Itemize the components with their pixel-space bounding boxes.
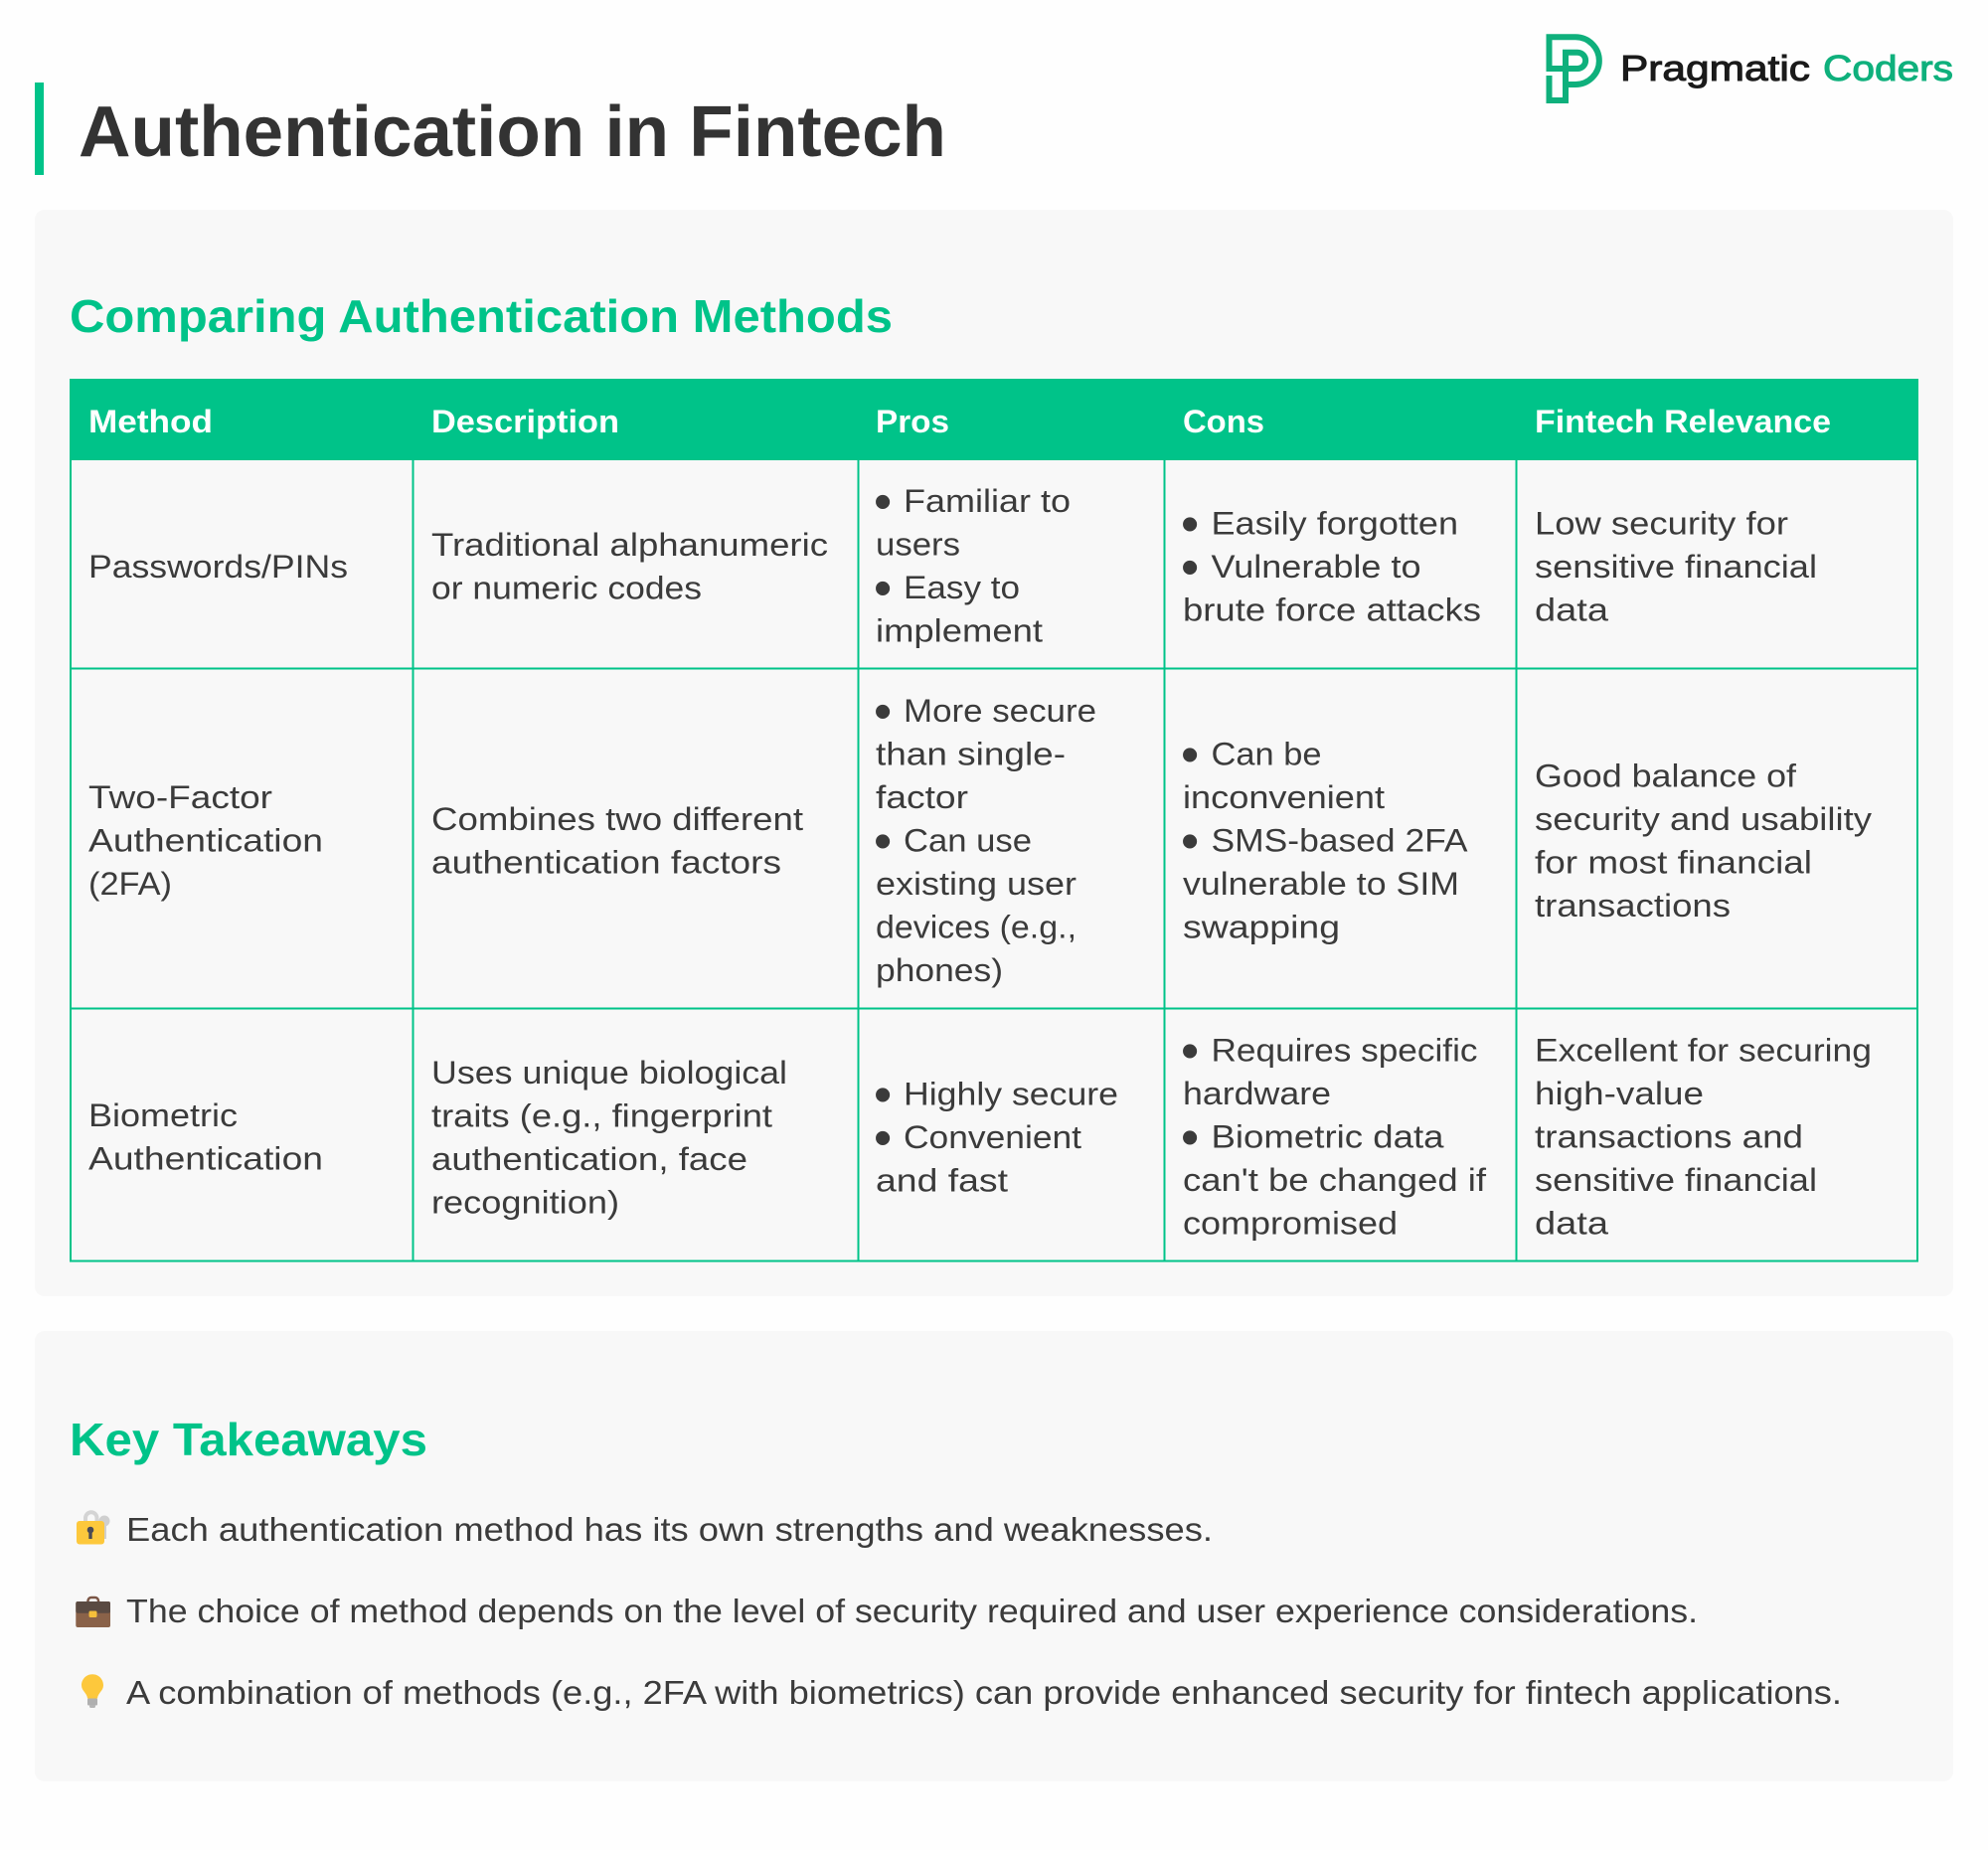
icon: logo mark <box>1549 37 1599 100</box>
takeaway text: Each authentication method has its own strengths and weaknesses. <box>126 1511 1213 1548</box>
cell: fintech relevance: high-value <box>1535 1076 1704 1111</box>
cell: description <box>431 1055 787 1221</box>
icon: briefcase <box>76 1598 110 1627</box>
cell: cons: hardware <box>1183 1076 1331 1111</box>
cell: fintech relevance <box>1535 757 1872 924</box>
cell: pros: factor <box>876 779 968 815</box>
cell: pros: Can use <box>904 823 1032 859</box>
cell: pros: • <box>874 473 892 531</box>
cell: cons: • <box>1181 1109 1199 1167</box>
cell: pros <box>874 473 1071 648</box>
cell: pros: existing user <box>876 866 1077 902</box>
cell: cons: can't be changed if <box>1183 1162 1486 1198</box>
cell: description <box>431 527 828 606</box>
cell: pros: phones) <box>876 952 1003 988</box>
cell: cons <box>1181 726 1468 944</box>
header: Cons: Cons <box>1183 404 1264 439</box>
cell: description: Uses unique biological <box>431 1055 787 1091</box>
cell: pros: implement <box>876 612 1043 648</box>
cell: cons: • <box>1181 1022 1199 1080</box>
cell: method: (2FA) <box>88 866 172 902</box>
cell: cons <box>1181 495 1481 628</box>
icon: lock with key <box>77 1512 109 1545</box>
cell: description: or numeric codes <box>431 571 702 606</box>
cell: description <box>431 801 803 881</box>
cell: pros: • <box>874 560 892 617</box>
header: Method: Method <box>88 404 213 439</box>
heading: comparing authentication methods: Comparing Authentication Methods <box>70 290 893 342</box>
icon: light bulb <box>82 1674 103 1708</box>
header: Pros: Pros <box>876 404 949 439</box>
cell: cons: SMS-based 2FA <box>1211 823 1468 859</box>
cell: pros: than single- <box>876 736 1066 771</box>
takeaway 3 <box>82 1674 1842 1711</box>
cell: cons: inconvenient <box>1183 779 1385 815</box>
cell: method: Passwords/PINs <box>88 549 348 585</box>
table header row <box>70 379 1918 460</box>
cell: fintech relevance: for most financial <box>1535 845 1812 881</box>
cell: fintech relevance <box>1535 1032 1872 1241</box>
cell: fintech relevance: security and usability <box>1535 801 1872 837</box>
cell: cons: Biometric data <box>1211 1119 1444 1155</box>
takeaway text: A combination of methods (e.g., 2FA with biometrics) can provide enhanced security for fintech applications. <box>126 1674 1842 1711</box>
cell: fintech relevance: data <box>1535 592 1608 628</box>
cell: cons: Easily forgotten <box>1211 505 1458 541</box>
cell: fintech relevance: transactions <box>1535 888 1731 924</box>
cell: pros: Easy to <box>904 570 1020 605</box>
cell: fintech relevance: data <box>1535 1205 1608 1241</box>
logo wordmark: Pragmatic <box>1620 48 1810 88</box>
cell: cons: Vulnerable to <box>1211 549 1421 585</box>
takeaway text: The choice of method depends on the level of security required and user experience considerations. <box>126 1593 1698 1629</box>
row: Two-Factor Authentication <box>88 683 1872 988</box>
cell: cons: vulnerable to SIM <box>1183 866 1459 902</box>
row: Biometric Authentication <box>88 1022 1872 1241</box>
cell: description: traits (e.g., fingerprint <box>431 1097 772 1133</box>
cell: pros: • <box>874 1109 892 1167</box>
cell: pros: • <box>874 683 892 741</box>
takeaway 1 <box>77 1511 1213 1548</box>
comparison table <box>70 379 1918 1261</box>
title accent bar <box>35 83 44 175</box>
cell: cons: • <box>1181 495 1199 553</box>
row: Passwords/PINs <box>88 473 1817 648</box>
cell: cons: swapping <box>1183 909 1340 944</box>
header: Description: Description <box>431 404 619 439</box>
heading: key takeaways: Key Takeaways <box>70 1414 427 1465</box>
cell: fintech relevance: sensitive financial <box>1535 549 1817 585</box>
cell: method: Authentication <box>88 823 323 859</box>
logo wordmark: Coders <box>1823 48 1953 88</box>
panel: key takeaways <box>35 1331 1953 1781</box>
cell: description: Combines two different <box>431 801 803 837</box>
cell: pros: More secure <box>904 693 1096 729</box>
header: Fintech Relevance: Fintech Relevance <box>1535 404 1831 439</box>
cell: pros <box>874 683 1096 988</box>
cell: fintech relevance <box>1535 505 1817 628</box>
cell: cons: brute force attacks <box>1183 592 1481 628</box>
cell: description: recognition) <box>431 1185 619 1221</box>
cell: pros: and fast <box>876 1163 1008 1199</box>
cell: pros: devices (e.g., <box>876 909 1077 944</box>
cell: method: Biometric <box>88 1097 238 1133</box>
cell: cons: • <box>1181 726 1199 783</box>
cell: cons: • <box>1181 539 1199 596</box>
cell: fintech relevance: Good balance of <box>1535 757 1796 793</box>
cell: pros <box>874 1066 1118 1199</box>
cell: method <box>88 779 323 902</box>
takeaway 2 <box>76 1593 1698 1629</box>
cell: description: Traditional alphanumeric <box>431 527 828 563</box>
logo: Pragmatic Coders <box>1549 37 1953 100</box>
cell: pros: Convenient <box>904 1119 1081 1155</box>
cell: method: Authentication <box>88 1141 323 1177</box>
cell: cons: Can be <box>1211 736 1322 771</box>
cell: pros: Highly secure <box>904 1076 1118 1111</box>
cell: cons: compromised <box>1183 1205 1398 1241</box>
cell: description: authentication, face <box>431 1141 747 1177</box>
cell: method: Two-Factor <box>88 779 272 815</box>
panel: comparing authentication methods <box>35 210 1953 1296</box>
cell: pros: Familiar to <box>904 483 1071 519</box>
cell: cons: Requires specific <box>1211 1032 1477 1068</box>
cell: pros: users <box>876 527 960 563</box>
cell: fintech relevance: Excellent for securing <box>1535 1032 1872 1068</box>
cell: method <box>88 1097 323 1177</box>
cell: cons <box>1181 1022 1486 1241</box>
cell: fintech relevance: transactions and <box>1535 1119 1803 1155</box>
cell: pros: • <box>874 1066 892 1123</box>
title: Authentication in Fintech <box>79 92 946 172</box>
cell: pros: • <box>874 813 892 871</box>
cell: fintech relevance: Low security for <box>1535 505 1788 541</box>
cell: fintech relevance: sensitive financial <box>1535 1162 1817 1198</box>
cell: cons: • <box>1181 813 1199 871</box>
cell: description: authentication factors <box>431 845 781 881</box>
